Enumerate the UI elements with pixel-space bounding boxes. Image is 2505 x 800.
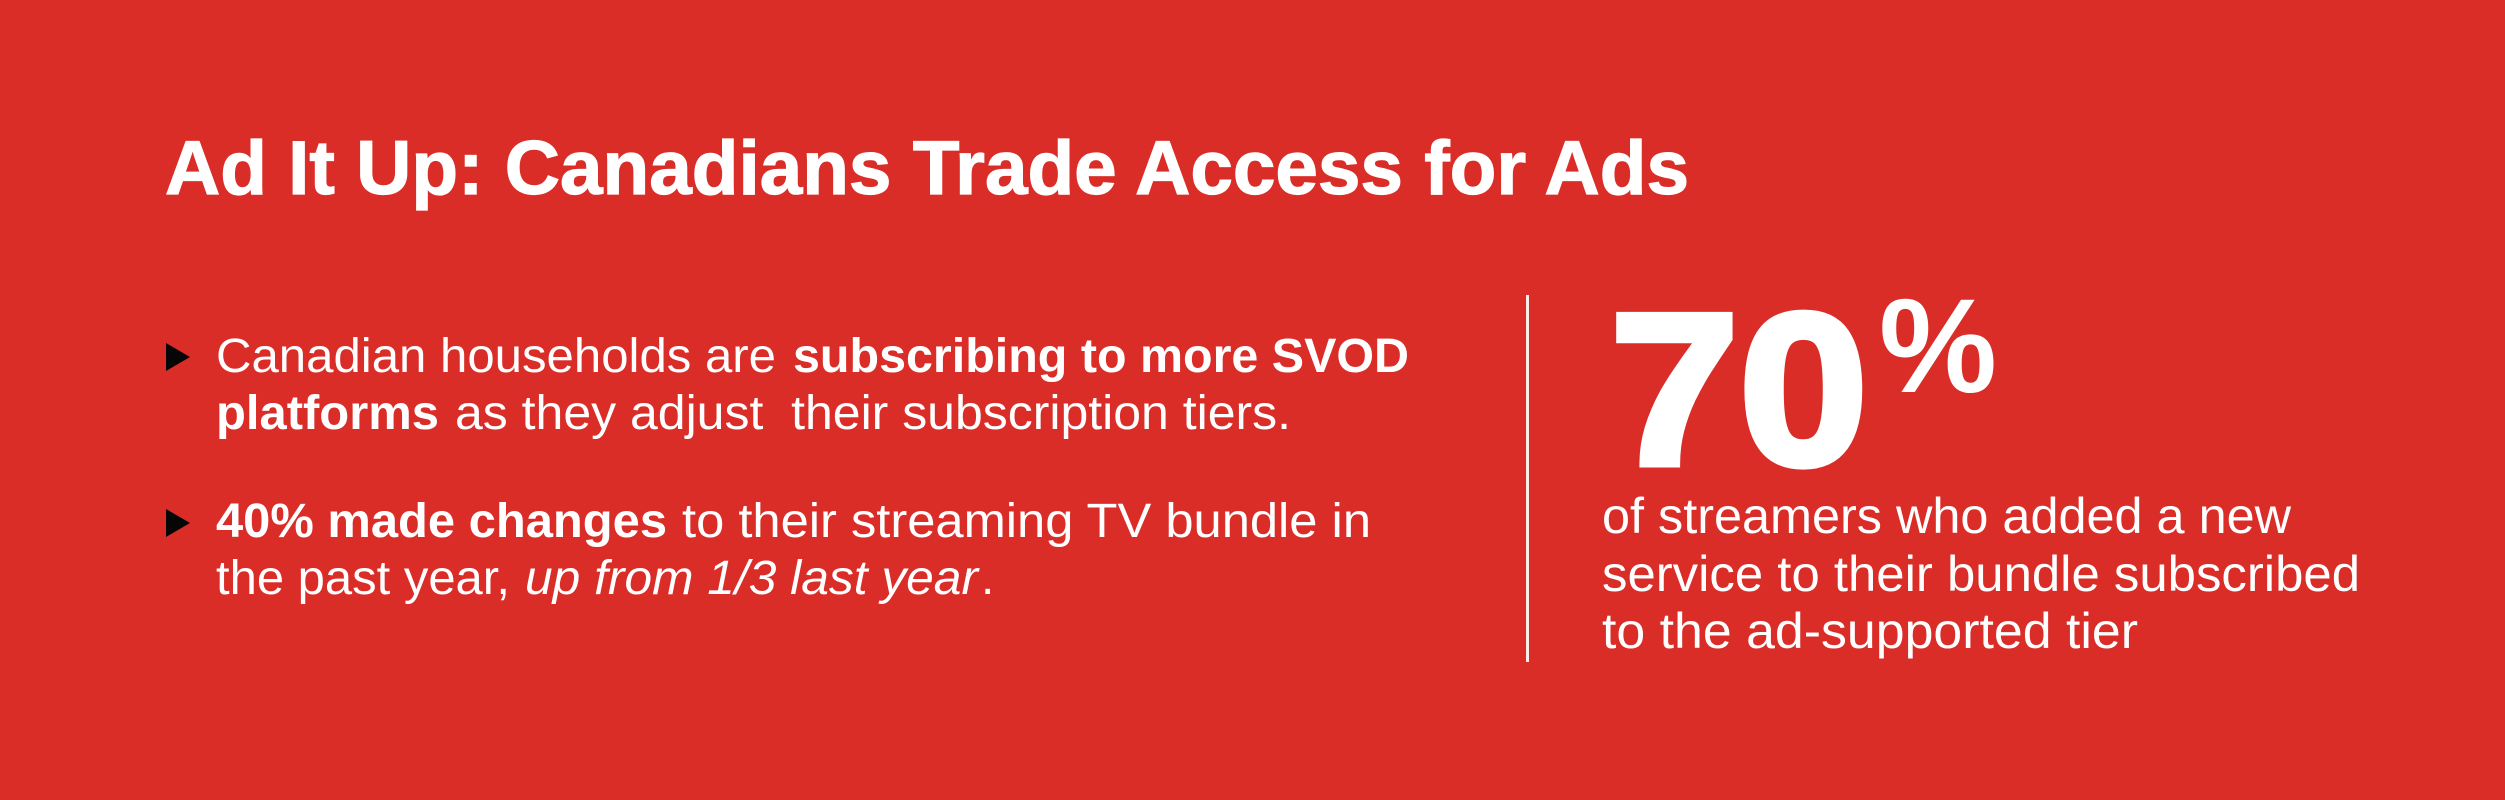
percent sign: % bbox=[1879, 272, 1997, 421]
bullet one text: Canadian households are bbox=[216, 330, 776, 383]
bullet two text: up from 1/3 last year bbox=[525, 552, 980, 605]
bullet two text: the past year, bbox=[216, 552, 510, 605]
bullet two text: 40% made changes bbox=[216, 495, 667, 548]
statistic caption: service to their bundle subscribed bbox=[1602, 546, 2360, 602]
statistic caption: of streamers who added a new bbox=[1602, 488, 2292, 544]
statistic: 70 percent bbox=[1610, 268, 1997, 510]
bullet list bbox=[166, 330, 1409, 605]
bullet two text bbox=[216, 495, 1371, 605]
bullet one text: as they adjust their subscription tiers. bbox=[455, 387, 1291, 440]
icon: arrow bullet two bbox=[166, 509, 190, 537]
statistic caption bbox=[1602, 488, 2360, 659]
bullet one bbox=[166, 330, 1409, 440]
statistic caption: to the ad-supported tier bbox=[1602, 603, 2138, 659]
bullet two bbox=[166, 495, 1371, 605]
big number 70: 70 bbox=[1610, 268, 1868, 510]
bullet two text: to their streaming TV bundle in bbox=[682, 495, 1371, 548]
bullet one text bbox=[216, 330, 1409, 440]
title: Ad It Up: Canadians Trade Access for Ads bbox=[165, 126, 1689, 211]
bullet one text: subscribing to more SVOD bbox=[793, 330, 1409, 383]
bullet one text: platforms bbox=[216, 387, 439, 440]
vertical divider bbox=[1526, 295, 1529, 662]
icon: arrow bullet one bbox=[166, 343, 190, 371]
bullet two text: . bbox=[981, 552, 994, 605]
